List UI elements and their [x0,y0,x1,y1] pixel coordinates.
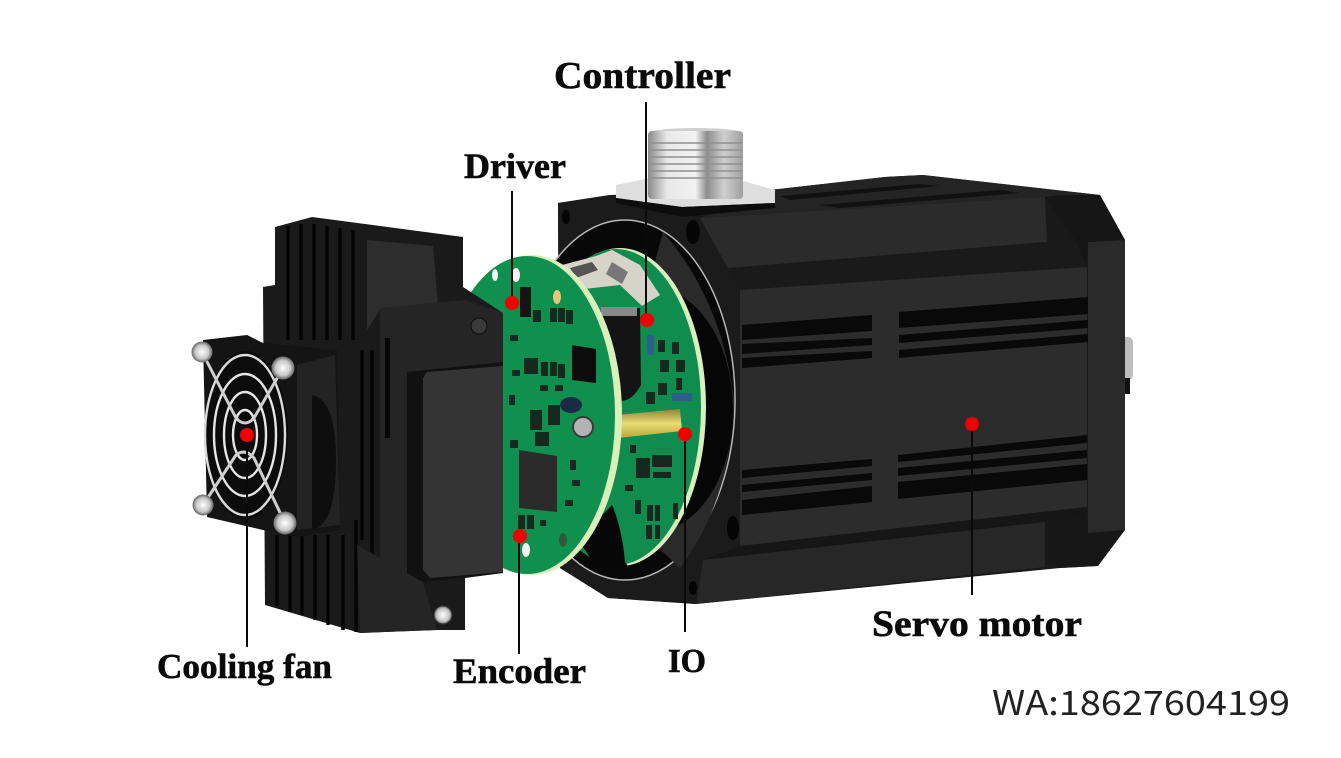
cover plate [423,366,503,578]
red marker dots [240,296,979,543]
heat sink top block [367,240,438,330]
lower recess [703,507,1087,560]
fan rotor edge [312,395,336,530]
front flange [558,195,740,604]
motor outline [558,175,1125,604]
mid block [380,300,503,575]
io board cutout [578,505,628,572]
label: Servo motor: Servo motor [872,604,1082,645]
cooling fan [192,335,340,537]
fan screws [192,342,296,534]
driver and encoder board [439,255,622,575]
upper recess [705,240,1087,290]
black component [590,307,641,401]
fan grille [202,352,285,523]
driver chip [520,287,531,317]
main chip [572,345,596,383]
capacitor [560,397,582,413]
mounting screw [434,606,452,624]
side slot [385,338,390,438]
heat sink fins [277,224,372,632]
motor shaft stub [1120,337,1133,394]
heat sink [263,217,503,633]
label: Cooling fan: Cooling fan [157,647,332,686]
IO and controller board [531,248,706,572]
gold bar [618,409,682,438]
connector [616,128,775,217]
io board components [625,340,692,539]
fan mouth [204,351,288,519]
motor opening [515,220,735,580]
rear flange [1045,195,1125,568]
leader lines [247,102,972,654]
encoder chip [519,450,557,512]
bottom block [357,545,437,633]
driver board components [509,308,580,529]
board holes [492,268,567,557]
upper side panel [700,197,1047,270]
motor vents [742,297,1088,515]
servo motor body [515,175,1133,604]
board screw [573,417,593,437]
fan side [297,355,340,530]
label: IO: IO [668,643,706,680]
contact number: WA:18627604199 [992,676,1290,725]
main side panel [740,267,1087,546]
bottom side panel [696,522,1045,604]
label: Encoder: Encoder [453,651,586,691]
dark step [407,362,503,582]
label: Driver: Driver [464,146,566,186]
top screw [471,318,487,334]
blue resistor [647,335,654,355]
top face [700,175,1100,218]
label: Controller: Controller [554,55,731,97]
board connectors [562,250,660,306]
